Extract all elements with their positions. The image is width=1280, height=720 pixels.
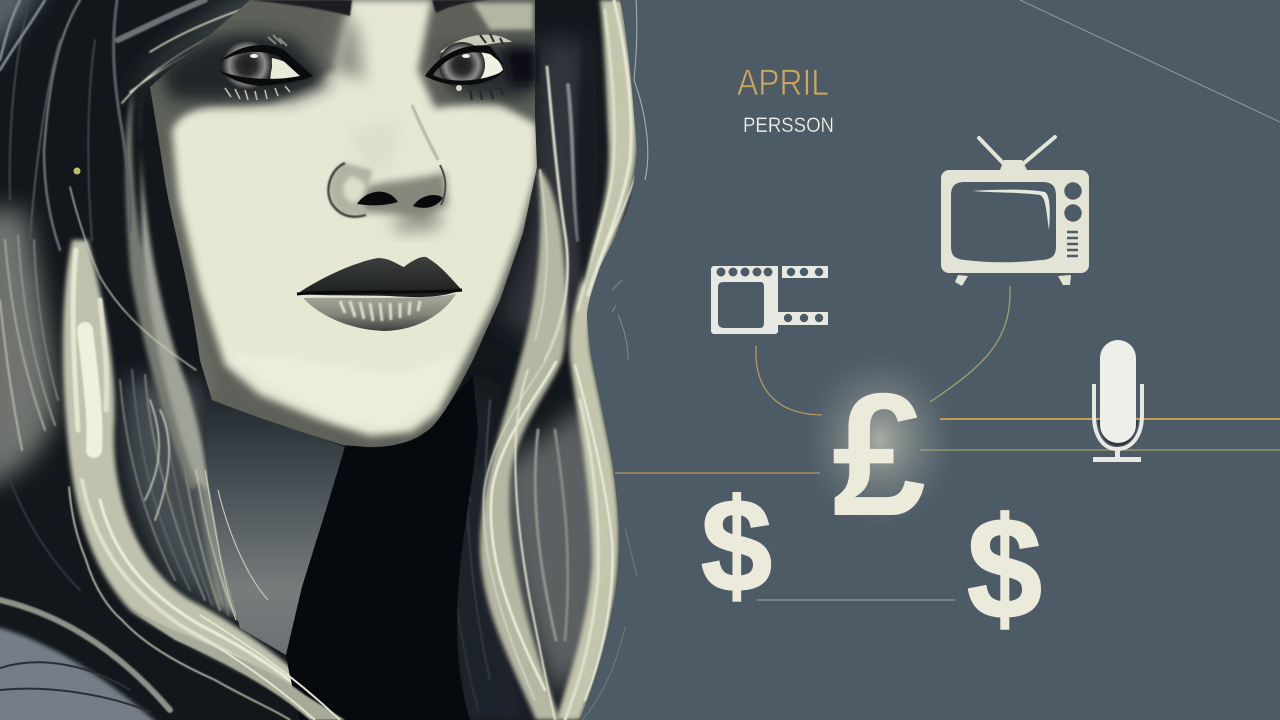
hair: main left band bbox=[60, 236, 292, 694]
subtitle: PERSSON: PERSSON bbox=[743, 114, 834, 137]
hair: fine highlights and shadow lines bbox=[0, 0, 636, 720]
portrait illustration bbox=[0, 0, 648, 720]
hair strands bbox=[0, 0, 637, 720]
icon: dollar right: $ bbox=[967, 488, 1042, 649]
icon: television bbox=[941, 137, 1089, 286]
face bbox=[150, 0, 537, 447]
icon: pound glow and symbol: £ bbox=[832, 358, 926, 553]
under-chin black shadow bbox=[286, 375, 478, 720]
hair: soft tonal masses bbox=[0, 0, 612, 720]
hair wisps outside silhouette bbox=[582, 0, 648, 720]
earring bbox=[74, 168, 80, 174]
icon: microphone bbox=[1093, 340, 1142, 462]
eyebrows bbox=[250, 0, 490, 16]
hair: right bright bands bbox=[556, 0, 637, 720]
right eye bbox=[425, 34, 536, 100]
hair: fine dark-to-mid streaks bbox=[0, 0, 498, 710]
title: APRIL: APRIL bbox=[737, 62, 829, 103]
lips bbox=[297, 257, 462, 331]
nose bbox=[328, 163, 448, 220]
hair: shoulder bbox=[0, 625, 165, 720]
connector lines bbox=[615, 286, 1280, 600]
hair base bbox=[0, 0, 637, 720]
icon: film strip bbox=[711, 266, 828, 334]
left eye bbox=[160, 33, 330, 100]
lower hair crossing neck bbox=[130, 610, 345, 720]
neck strands bbox=[205, 470, 268, 620]
face shading bbox=[150, 0, 537, 436]
icon: pound glow and symbol bbox=[802, 352, 958, 553]
decorative line top right bbox=[1020, 0, 1280, 122]
icon: dollar left: $ bbox=[701, 472, 772, 619]
neck bbox=[205, 395, 345, 655]
